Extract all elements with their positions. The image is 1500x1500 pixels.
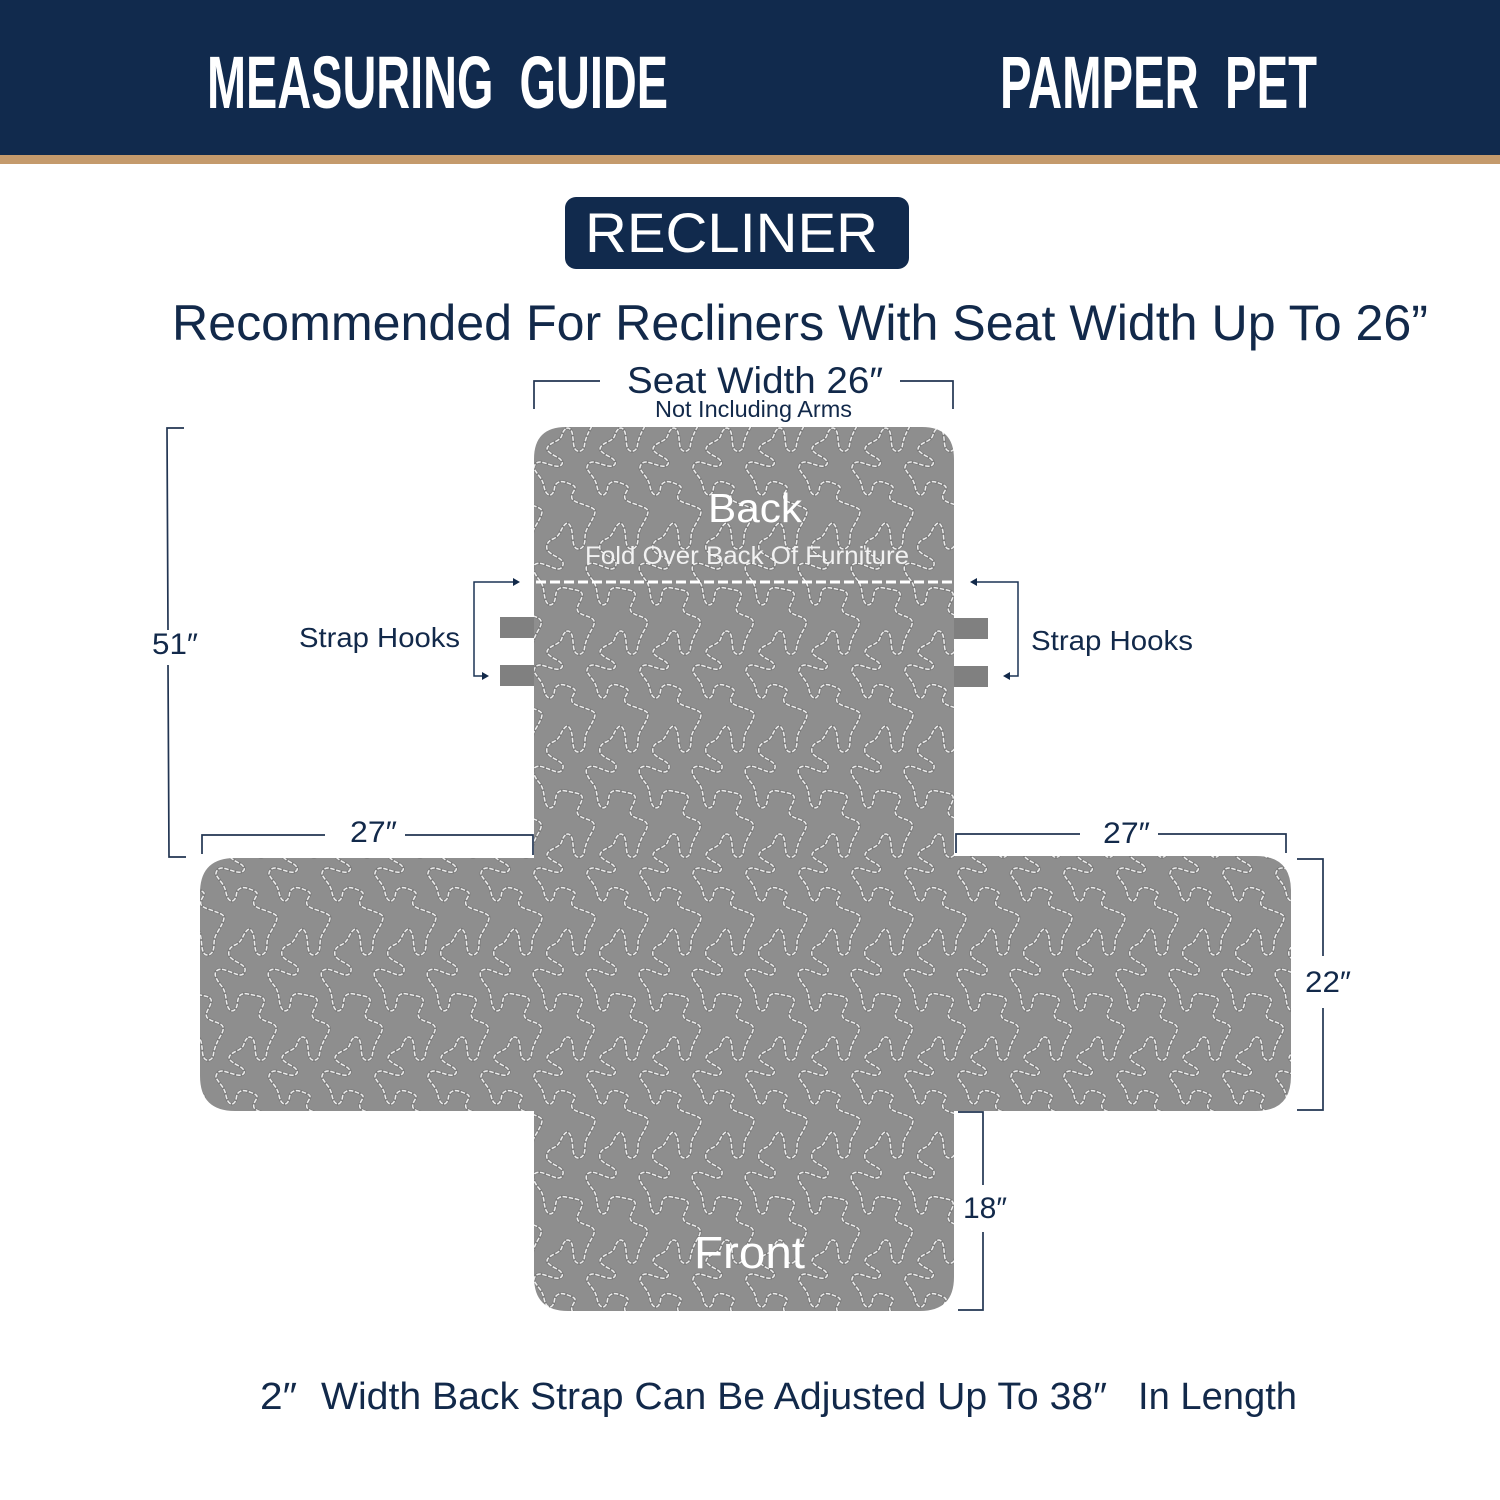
right strap hooks callout xyxy=(970,578,1193,680)
dimension: 22 inch xyxy=(1297,859,1351,1110)
brand: pamper pet: PAMPER PET xyxy=(1000,41,1317,124)
dimension: seat width: Seat Width 26″ xyxy=(627,360,883,401)
badge: recliner: RECLINER xyxy=(585,201,878,264)
left strap tabs xyxy=(500,617,535,686)
dimension: 51 inch xyxy=(152,428,198,857)
dimension: right arm 27 inch xyxy=(956,817,1286,853)
dimension: left arm 27 inch xyxy=(202,816,533,855)
dimension: 22 inch: 22″ xyxy=(1305,966,1351,999)
label: front: Front xyxy=(694,1227,806,1278)
dimension: 18 inch xyxy=(958,1112,1007,1310)
footer note: 2″ xyxy=(260,1376,297,1418)
dimension: 51 inch: 51″ xyxy=(152,628,198,661)
dimension: seat width xyxy=(534,360,953,422)
dimension: right arm 27 inch: 27″ xyxy=(1103,817,1150,850)
left strap hooks callout xyxy=(299,578,520,680)
label: fold over back of furniture: Fold Over Back Of Furniture xyxy=(585,542,909,570)
quilted recliner cover xyxy=(200,427,1291,1311)
header banner xyxy=(0,0,1500,164)
left strap hooks callout: Strap Hooks xyxy=(299,622,460,653)
title: measuring guide: MEASURING GUIDE xyxy=(207,41,668,124)
footer note: Width Back Strap Can Be Adjusted Up To 38″ xyxy=(321,1376,1107,1418)
dimension: seat width: Not Including Arms xyxy=(655,396,852,422)
dimension: 18 inch: 18″ xyxy=(963,1192,1007,1225)
label: back: Back xyxy=(708,485,803,531)
fold line xyxy=(536,580,954,584)
right strap hooks callout: Strap Hooks xyxy=(1031,625,1193,656)
heading: recommendation: Recommended For Recliners With Seat Width Up To 26” xyxy=(172,295,1428,351)
dimension: left arm 27 inch: 27″ xyxy=(350,816,397,849)
right strap tabs xyxy=(953,618,988,687)
footer note: In Length xyxy=(1138,1376,1297,1418)
